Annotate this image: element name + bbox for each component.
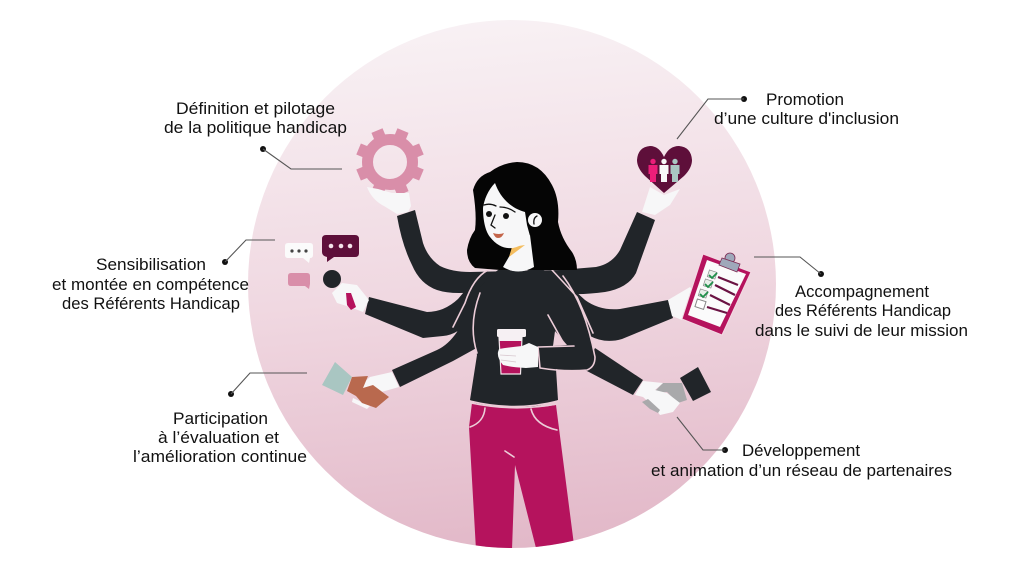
trousers [469,403,574,552]
leader line: promotion [677,96,747,139]
trousers outlines [470,403,557,457]
torso outlines [453,270,595,406]
text: accompagnement: des Référents Handicap [775,302,951,320]
torso [470,267,595,409]
handshake left [322,362,399,409]
text: participation: l’amélioration continue [133,448,307,466]
text: accompagnement [755,283,968,340]
lower left arm [392,300,484,387]
leader line: accompagnement [754,257,824,277]
icon: maroon speech bubble [322,235,359,262]
text: promotion: Promotion [766,91,844,109]
icon: white speech bubble [285,243,313,263]
text: promotion: d’une culture d'inclusion [714,110,899,128]
text: politique handicap: de la politique handicap [164,119,347,137]
hand holding cup [498,343,538,368]
icon: gear [356,128,424,196]
middle right arm [555,273,673,341]
hair [467,162,577,270]
leader line: partenaires [677,417,728,453]
icon: clipboard checklist [682,253,751,335]
hand holding clipboard [668,287,696,320]
text: participation: à l’évaluation et [158,429,279,447]
hand under gear [367,187,411,214]
text: sensibilisation: des Référents Handicap [62,295,240,313]
text: partenaires: et animation d’un réseau de partenaires [651,462,952,480]
text: sensibilisation [52,256,249,313]
text: politique handicap: Définition et pilotage [176,100,335,118]
text: sensibilisation: Sensibilisation [96,256,206,274]
icon: microphone [323,270,369,312]
neck [503,235,534,272]
face [483,183,530,248]
text: partenaires: Développement [742,442,860,460]
handshake right [635,367,711,415]
middle left arm [365,273,495,338]
upper arms raised [397,210,655,294]
hand under heart [642,187,680,215]
icon: heart with people [637,146,692,193]
text: partenaires [651,442,952,480]
leader line: participation [228,373,307,397]
ear [528,213,542,227]
central figure: woman with several arms [365,162,673,552]
text: accompagnement: dans le suivi de leur mission [755,322,968,340]
leader line: politique handicap [260,146,342,169]
leader line: sensibilisation [222,240,275,265]
coffee cup [497,329,526,374]
gap between sleeve and body [553,331,567,346]
eyes, nose, brows, mouth [484,204,537,238]
text: participation [133,410,307,466]
background circle [248,20,776,548]
lower right arm [585,348,643,395]
neck shadow [509,245,525,257]
text: sensibilisation: et montée en compétence [52,276,249,294]
text: politique handicap [164,100,347,137]
text: participation: Participation [173,410,268,428]
icon: pink speech bubble [288,273,310,289]
text: accompagnement: Accompagnement [795,283,929,301]
text: promotion [714,91,899,128]
